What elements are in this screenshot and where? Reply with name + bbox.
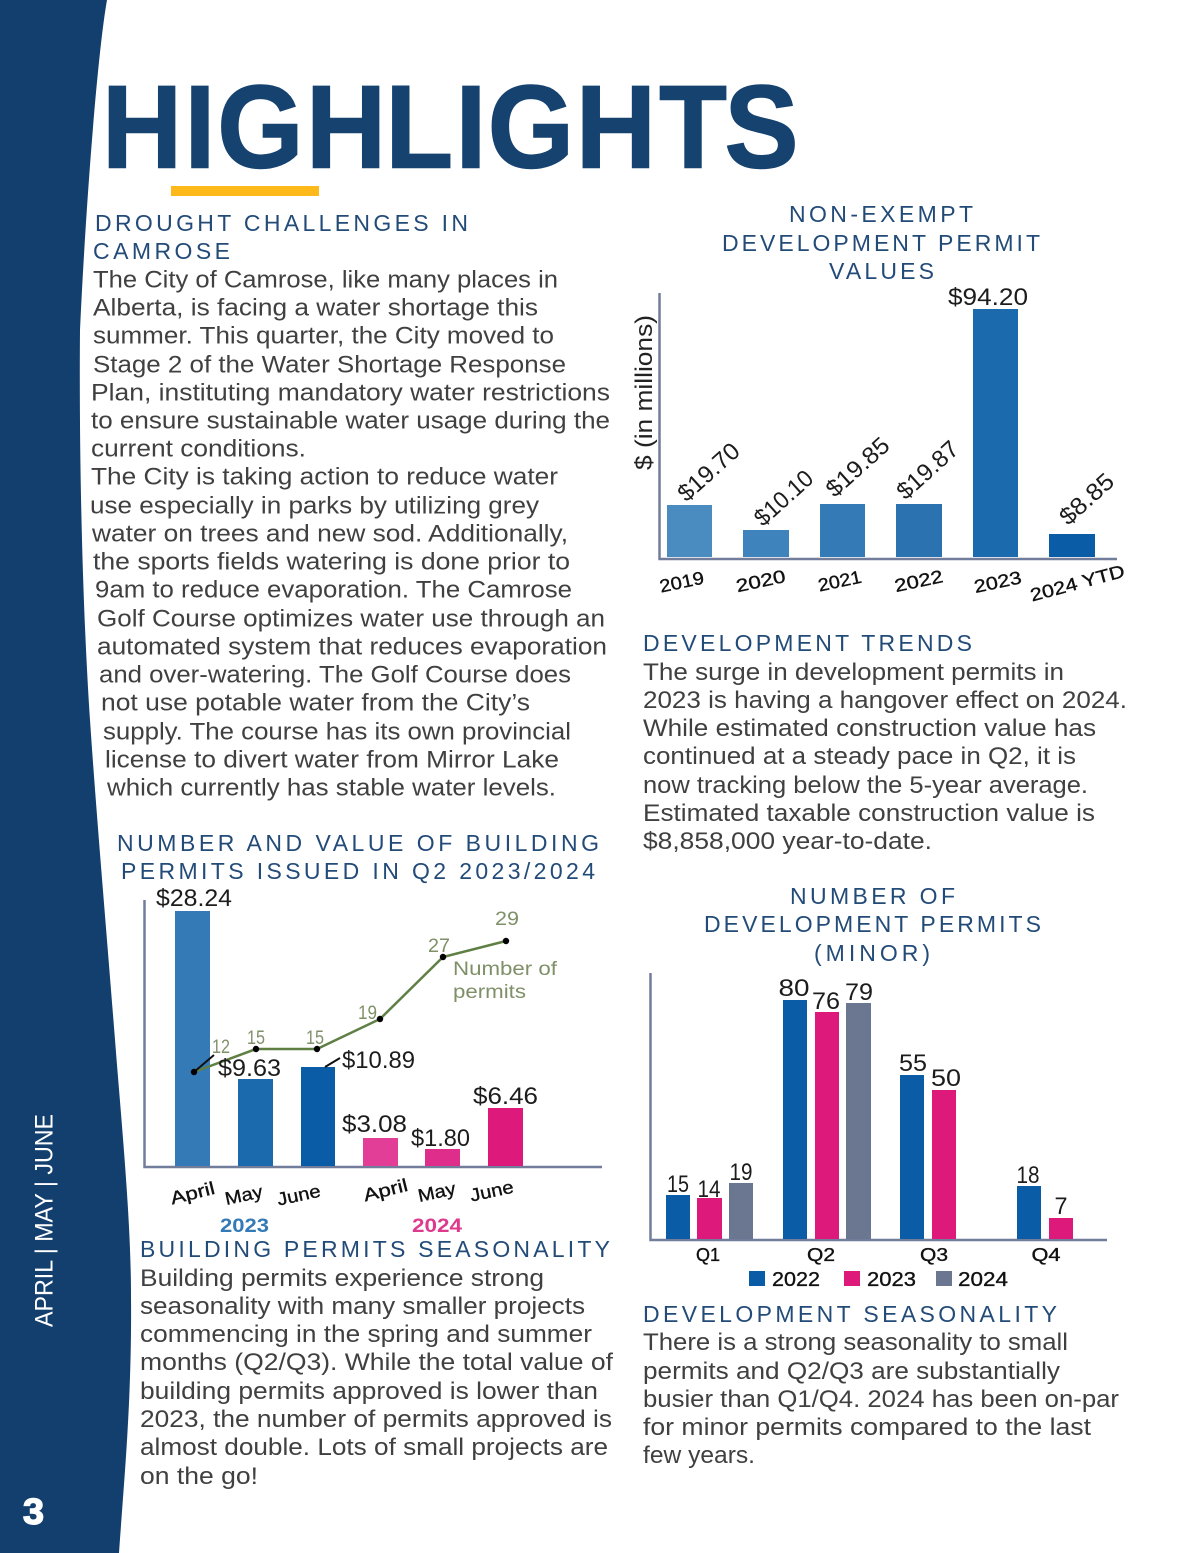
value labels: $19.70: [672, 438, 746, 507]
heading: number of development permits: NUMBER OF: [790, 883, 955, 909]
line value labels: Number of: [453, 959, 558, 980]
line value labels: 15: [306, 1028, 324, 1049]
heading: drought challenges: CAMROSE: [93, 238, 230, 264]
heading: non-exempt development permit values: NON-EXEMPT: [789, 201, 973, 227]
panel: development trends text: [643, 630, 1127, 855]
line: number of permits: [191, 938, 509, 1075]
value labels: 55: [899, 1050, 927, 1077]
body text: drought: The City of Camrose, like many places in: [93, 266, 558, 294]
line value labels: 27: [428, 936, 450, 957]
heading: development seasonality: DEVELOPMENT SEASONALITY: [643, 1301, 1057, 1327]
year labels: 2022: [893, 566, 945, 596]
bar value labels: $3.08: [342, 1111, 407, 1138]
quarter labels: Q4: [1032, 1245, 1060, 1265]
value labels: 14: [698, 1176, 720, 1203]
body text: drought: use especially in parks by utilizing grey: [90, 492, 539, 520]
year labels: 2024 YTD: [1028, 561, 1127, 605]
body text: drought: 9am to reduce evaporation. The Camrose: [95, 576, 572, 604]
body text: drought: water on trees and new sod. Additionally,: [91, 520, 568, 548]
body text: building permits seasonality: months (Q2/Q3). While the total value of: [140, 1349, 613, 1376]
body text: development trends: Estimated taxable construction value is: [643, 800, 1095, 827]
body text: development seasonality: for minor permits compared to the last: [643, 1414, 1091, 1441]
legend: 2022: [772, 1269, 820, 1291]
year labels: 2020: [734, 566, 787, 596]
heading: building permits chart: PERMITS ISSUED IN Q2 2023/2024: [121, 858, 595, 884]
title: HIGHLIGHTS: [102, 61, 798, 193]
bar value labels: $28.24: [156, 885, 232, 912]
bars: 2024: [729, 1003, 871, 1239]
body text: development trends: $8,858,000 year-to-date.: [643, 828, 932, 855]
body text: drought: not use potable water from the City’s: [101, 690, 530, 716]
value labels: [667, 975, 1068, 1220]
body text: building permits seasonality: commencing in the spring and summer: [140, 1321, 592, 1348]
legend: 2024: [958, 1269, 1008, 1291]
body text: development trends: continued at a steady pace in Q2, it is: [643, 743, 1076, 770]
bar value labels: $9.63: [218, 1055, 281, 1082]
year group labels: 2023: [220, 1216, 269, 1237]
value labels: $10.10: [749, 465, 819, 532]
quarter labels: Q1: [696, 1245, 720, 1265]
month labels: May: [223, 1181, 264, 1209]
body text: building permits seasonality: 2023, the number of permits approved is: [140, 1406, 612, 1433]
body text: drought: current conditions.: [91, 436, 306, 462]
value labels: 79: [845, 979, 873, 1006]
value labels: 19: [730, 1159, 752, 1186]
body text: development seasonality: few years.: [643, 1442, 755, 1469]
bar value labels: $1.80: [411, 1125, 470, 1152]
sidebar text: months: APRIL | MAY | JUNE: [30, 1114, 58, 1327]
heading: building permits chart: [117, 830, 599, 884]
quarter labels: Q2: [807, 1245, 835, 1265]
panel: drought challenges text: [90, 210, 610, 802]
value labels: 7: [1054, 1193, 1068, 1220]
bar value labels: $6.46: [473, 1083, 538, 1110]
body text: building permits seasonality: Building permits experience strong: [140, 1265, 544, 1292]
legend: [749, 1269, 1008, 1291]
heading: number of development permits: [704, 883, 1041, 966]
bars: 2023: [697, 1012, 1073, 1239]
panel: non-exempt development permit values chart: [631, 201, 1127, 605]
line value labels: 29: [495, 909, 519, 930]
value labels: $8.85: [1054, 468, 1120, 531]
body text: building permits seasonality: seasonality with many smaller projects: [140, 1293, 585, 1320]
body text: development trends: While estimated construction value has: [643, 715, 1096, 742]
heading: building permits seasonality: BUILDING PERMITS SEASONALITY: [140, 1236, 610, 1262]
body text: building permits seasonality: building permits approved is lower than: [140, 1378, 598, 1405]
body text: drought: Alberta, is facing a water shortage this: [93, 294, 538, 322]
body text: development seasonality: permits and Q2/Q3 are substantially: [643, 1358, 1060, 1385]
body text: building permits seasonality: on the go!: [140, 1463, 258, 1490]
line value labels: 19: [358, 1003, 377, 1024]
y axis title: $ (in millions): [631, 315, 658, 470]
quarter labels: Q3: [920, 1245, 948, 1265]
heading: development trends: DEVELOPMENT TRENDS: [643, 630, 972, 656]
bar value labels: $10.89: [342, 1047, 415, 1074]
heading: number of development permits: DEVELOPMENT PERMITS: [704, 911, 1041, 937]
body text: drought: license to divert water from Mirror Lake: [105, 746, 559, 774]
value labels: $19.85: [821, 432, 895, 503]
body text: building permits seasonality: [140, 1265, 613, 1490]
value labels: [672, 284, 1120, 532]
body text: drought: The City is taking action to reduce water: [91, 464, 558, 490]
month labels: June: [468, 1177, 515, 1205]
year labels: 2019: [658, 568, 706, 597]
page number: 3: [23, 1491, 44, 1532]
value labels: $94.20: [948, 284, 1028, 311]
panel: building permits chart: [117, 830, 602, 1237]
heading: non-exempt development permit values: DEVELOPMENT PERMIT: [722, 230, 1040, 256]
body text: drought: [90, 266, 610, 802]
body text: drought: and over-watering. The Golf Course does: [99, 662, 571, 688]
line value labels: 12: [212, 1037, 230, 1058]
bars: 2022: [666, 1000, 1041, 1239]
body text: development seasonality: [643, 1329, 1119, 1469]
month labels: April: [361, 1175, 410, 1205]
heading: building permits chart: NUMBER AND VALUE OF BUILDING: [117, 830, 599, 856]
month labels: May: [416, 1178, 457, 1206]
body text: building permits seasonality: almost double. Lots of small projects are: [140, 1434, 608, 1461]
year group labels: [220, 1216, 462, 1237]
value labels: 50: [931, 1065, 961, 1092]
bars: yearly values: [667, 309, 1095, 557]
panel: building permits seasonality text: [140, 1236, 613, 1490]
body text: drought: supply. The course has its own provincial: [103, 718, 571, 746]
body text: drought: to ensure sustainable water usage during the: [91, 408, 610, 434]
body text: drought: Stage 2 of the Water Shortage Response: [93, 352, 566, 378]
body text: development trends: now tracking below the 5-year average.: [643, 772, 1088, 799]
month labels: June: [275, 1181, 322, 1209]
heading: non-exempt development permit values: VALUES: [829, 258, 934, 284]
body text: drought: Golf Course optimizes water use through an: [97, 606, 605, 632]
body text: drought: Plan, instituting mandatory water restrictions: [91, 380, 610, 406]
body text: development trends: [643, 659, 1127, 855]
year labels: [658, 561, 1127, 605]
value labels: 80: [778, 975, 810, 1002]
title underline accent: [171, 186, 319, 196]
body text: development trends: The surge in development permits in: [643, 659, 1064, 686]
bar value labels: [156, 885, 538, 1152]
body text: development seasonality: busier than Q1/Q4. 2024 has been on-par: [643, 1386, 1119, 1413]
legend: 2023: [867, 1269, 916, 1291]
heading: drought challenges: [93, 210, 468, 264]
body text: drought: the sports fields watering is done prior to: [93, 548, 570, 576]
line value labels: 15: [247, 1028, 265, 1049]
year labels: 2021: [816, 567, 863, 595]
month labels: [168, 1175, 515, 1209]
heading: non-exempt development permit values: [722, 201, 1040, 284]
value labels: $19.87: [891, 436, 965, 505]
quarter labels: [696, 1245, 1060, 1265]
month labels: April: [168, 1178, 217, 1208]
year group labels: 2024: [412, 1216, 462, 1237]
body text: drought: which currently has stable water levels.: [106, 774, 556, 802]
body text: development seasonality: There is a strong seasonality to small: [643, 1329, 1068, 1356]
heading: number of development permits: (MINOR): [814, 940, 930, 966]
panel: number of development permits minor chart: [650, 883, 1107, 1291]
heading: drought challenges: DROUGHT CHALLENGES IN: [95, 210, 468, 236]
panel: curved navy sidebar: [0, 0, 131, 1553]
body text: drought: automated system that reduces evaporation: [97, 634, 607, 660]
year labels: 2023: [972, 567, 1023, 597]
value labels: 15: [667, 1171, 689, 1198]
line value labels: [212, 909, 558, 1058]
body text: drought: summer. This quarter, the City moved to: [93, 322, 554, 350]
value labels: 76: [812, 988, 840, 1015]
line value labels: permits: [453, 982, 526, 1003]
value labels: 18: [1016, 1162, 1040, 1189]
bars: 2023 and 2024 values: [175, 911, 523, 1166]
body text: development trends: 2023 is having a hangover effect on 2024.: [643, 687, 1127, 714]
panel: development seasonality text: [643, 1301, 1119, 1469]
